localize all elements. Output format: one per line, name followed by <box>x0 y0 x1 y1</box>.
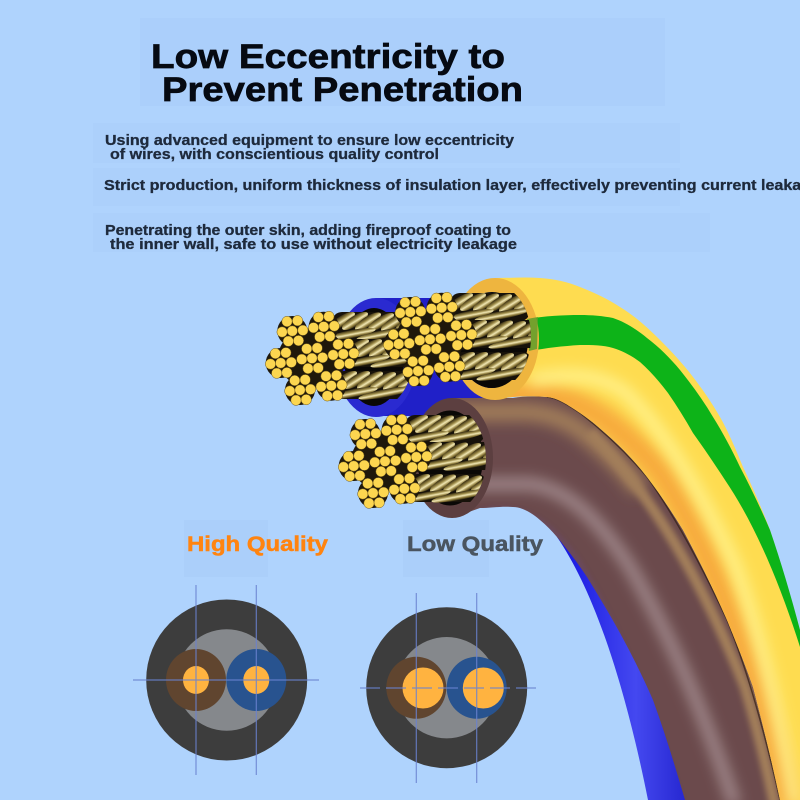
yellow-green cable <box>451 270 800 800</box>
title: Low Eccentricity to <box>151 38 505 76</box>
brown cable <box>411 390 800 800</box>
text block: penetrating: Penetrating the outer skin, adding fireproof coating to <box>105 223 511 239</box>
title panel <box>140 18 665 109</box>
title <box>151 38 523 109</box>
text block: low eccentricity <box>93 123 680 163</box>
wire bundle: blue <box>265 309 434 405</box>
wire bundle: yellow-green <box>383 290 552 386</box>
text block: penetrating: the inner wall, safe to use without electricity leakage <box>110 237 517 253</box>
cable illustration <box>265 270 800 800</box>
green stripe <box>527 315 800 647</box>
wire bundle: brown <box>338 412 507 508</box>
text block: low eccentricity: of wires, with conscientious quality control <box>110 147 439 163</box>
text block: strict production <box>93 168 800 206</box>
comparison label: High Quality: High Quality <box>187 533 328 556</box>
comparison label: High Quality <box>184 520 328 577</box>
diagram: high quality cross-section <box>133 585 319 775</box>
blue cable <box>335 298 700 800</box>
text block: penetrating <box>93 213 710 253</box>
title: Prevent Penetration <box>162 71 523 109</box>
text block: low eccentricity: Using advanced equipment to ensure low eccentricity <box>105 133 514 149</box>
text block: strict production: Strict production, uniform thickness of insulation layer, effectively preventing current leakage <box>104 178 800 194</box>
comparison label: Low Quality: Low Quality <box>407 533 543 556</box>
comparison label: Low Quality <box>403 520 543 577</box>
diagram: low quality cross-section <box>360 593 536 783</box>
